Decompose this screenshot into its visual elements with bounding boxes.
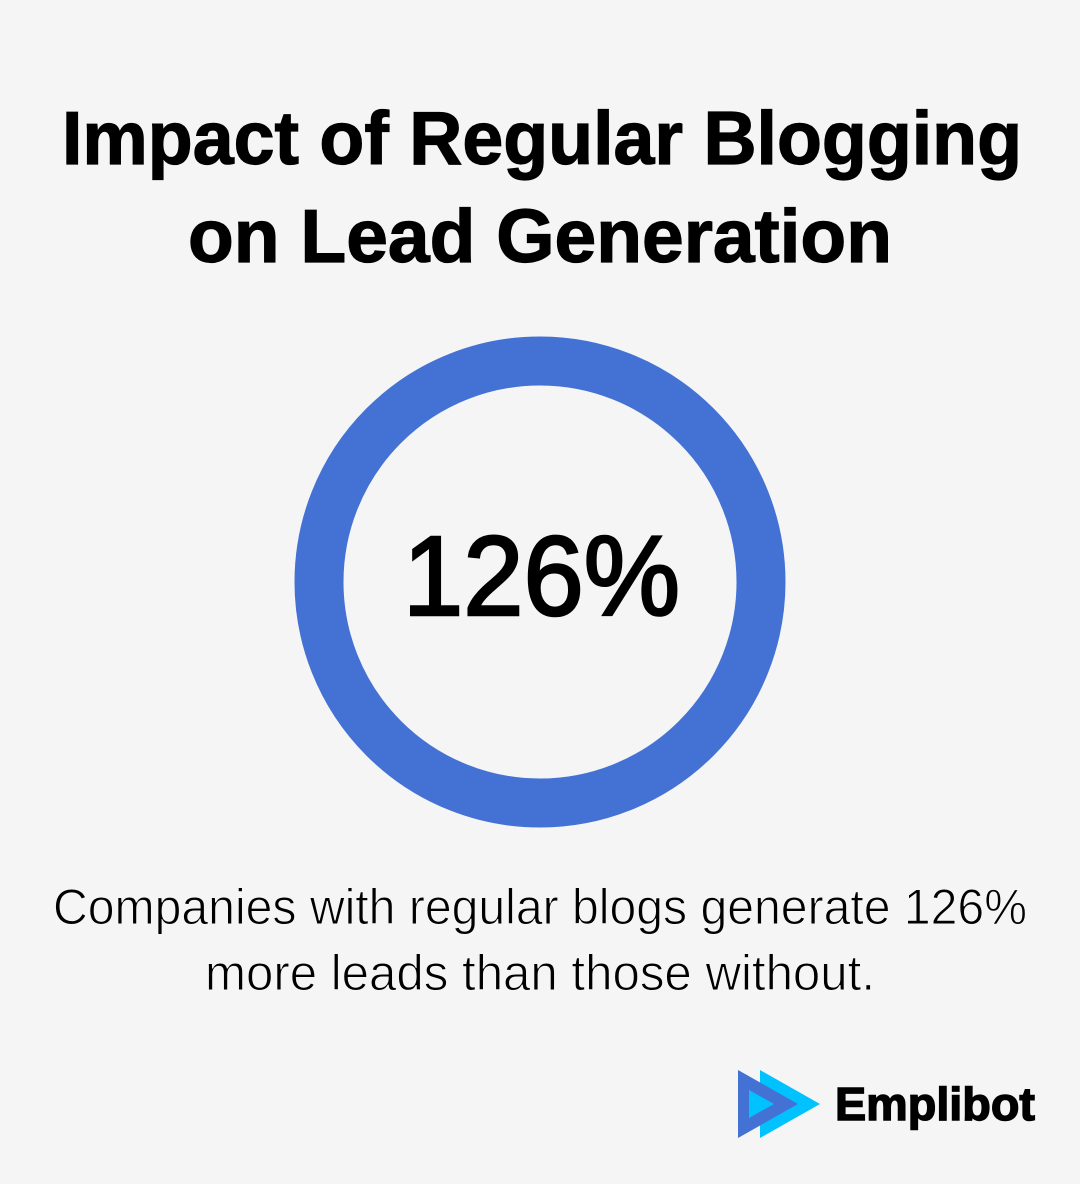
logo: [738, 1070, 1035, 1138]
title: on Lead Generation: [188, 194, 892, 278]
description: [53, 879, 1027, 1001]
title: Impact of Regular Blogging: [62, 96, 1022, 180]
icon: play triangles: [738, 1070, 820, 1138]
description: more leads than those without.: [205, 945, 875, 1001]
stat value: 126%: [403, 513, 680, 639]
donut ring: [319, 361, 761, 803]
title: [62, 96, 1022, 278]
description: Companies with regular blogs generate 126%: [53, 879, 1027, 935]
brand name: Emplibot: [835, 1078, 1035, 1130]
